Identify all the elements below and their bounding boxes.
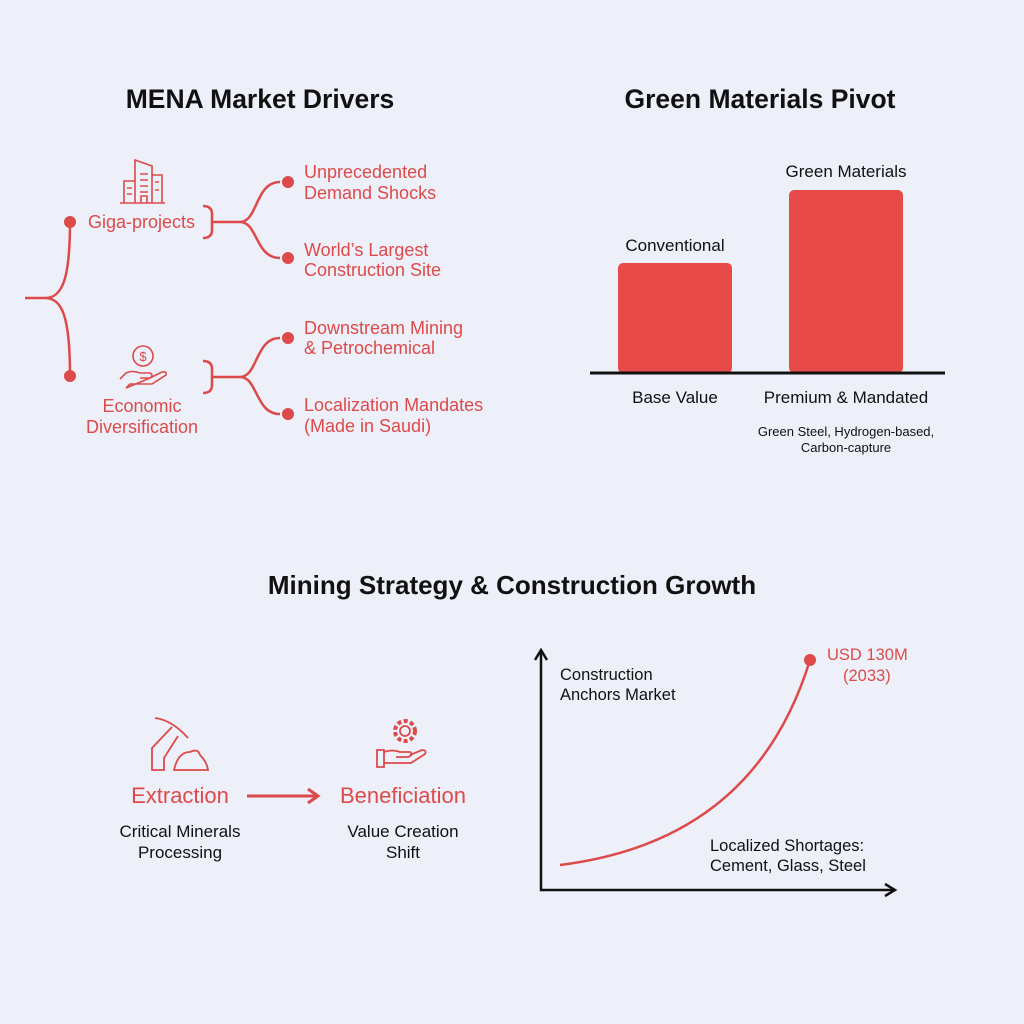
flow: extraction to beneficiation: Extraction bbox=[131, 783, 229, 808]
text: driver labels: Economic bbox=[102, 396, 182, 416]
flow: extraction to beneficiation bbox=[120, 783, 466, 862]
dots bbox=[64, 176, 294, 420]
text: driver labels: Demand Shocks bbox=[304, 183, 436, 203]
text: driver labels: (Made in Saudi) bbox=[304, 416, 431, 436]
bar chart: Green Steel, Hydrogen-based, bbox=[758, 424, 934, 439]
bar chart: Premium & Mandated bbox=[764, 388, 928, 407]
icon: money hand bbox=[120, 346, 166, 388]
growth chart: Anchors Market bbox=[560, 686, 676, 704]
growth chart: USD 130M bbox=[827, 646, 908, 664]
icon: pickaxe bbox=[152, 718, 208, 770]
growth chart: Localized Shortages: bbox=[710, 837, 864, 855]
title: MENA Market Drivers: MENA Market Drivers bbox=[126, 84, 394, 114]
text: driver labels: World’s Largest bbox=[304, 240, 428, 260]
panel: market drivers tree bbox=[25, 182, 280, 414]
flow: extraction to beneficiation: Beneficiation bbox=[340, 783, 466, 808]
growth chart: (2033) bbox=[843, 667, 891, 685]
growth chart: Construction bbox=[560, 666, 653, 684]
text: driver labels: Downstream Mining bbox=[304, 318, 463, 338]
growth chart: Cement, Glass, Steel bbox=[710, 857, 866, 875]
text: driver labels: Construction Site bbox=[304, 260, 441, 280]
text: driver labels: Localization Mandates bbox=[304, 395, 483, 415]
text: driver labels: Giga-projects bbox=[88, 212, 195, 232]
text: driver labels: & Petrochemical bbox=[304, 338, 435, 358]
flow: extraction to beneficiation: Processing bbox=[138, 843, 222, 862]
diversification bracket bbox=[203, 338, 280, 414]
flow: extraction to beneficiation: Shift bbox=[386, 843, 420, 862]
icon: money hand: $ bbox=[139, 349, 147, 364]
bar chart: Conventional bbox=[625, 236, 725, 255]
growth chart bbox=[535, 646, 908, 896]
icon: building bbox=[120, 160, 165, 203]
giga bracket bbox=[203, 182, 280, 258]
bar chart: Base Value bbox=[632, 388, 718, 407]
icon: gear hand bbox=[377, 721, 426, 767]
flow: extraction to beneficiation: Value Creation bbox=[347, 822, 459, 841]
title: Mining Strategy: Mining Strategy & Construction Growth bbox=[268, 570, 756, 600]
text: driver labels: Diversification bbox=[86, 417, 198, 437]
main bracket bbox=[25, 222, 70, 376]
text: driver labels bbox=[86, 162, 483, 437]
title: Green Materials Pivot: Green Materials Pivot bbox=[624, 84, 896, 114]
bar chart: Green Materials bbox=[786, 162, 906, 181]
flow: extraction to beneficiation: Critical Minerals bbox=[120, 822, 240, 841]
text: driver labels: Unprecedented bbox=[304, 162, 427, 182]
bar chart bbox=[590, 162, 945, 455]
bar chart: Carbon-capture bbox=[801, 440, 891, 455]
